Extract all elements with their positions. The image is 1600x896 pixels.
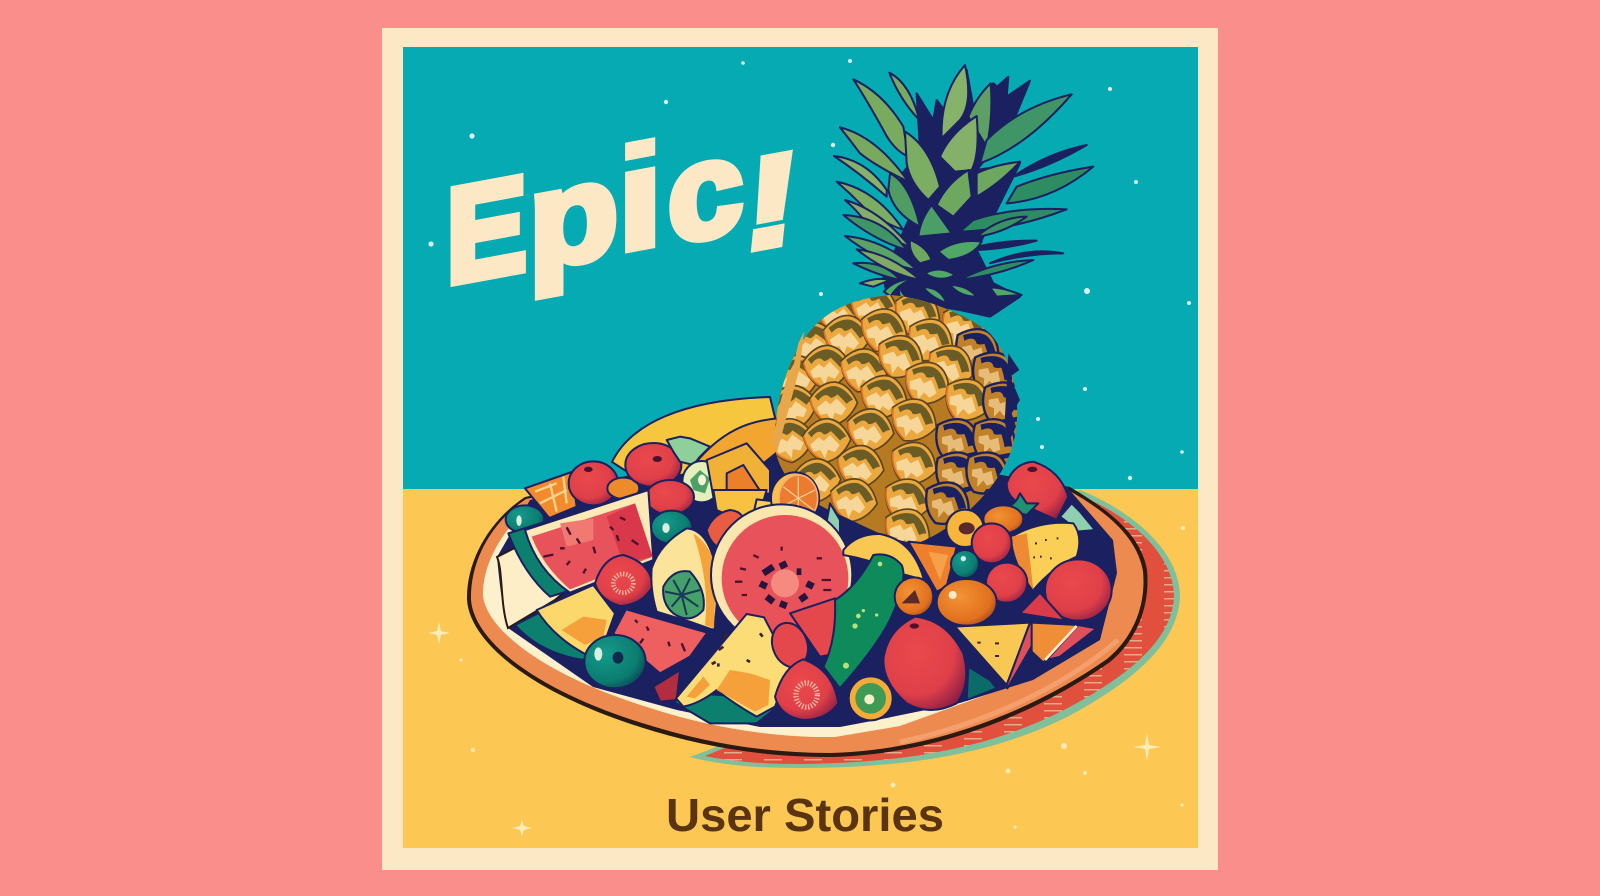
yellow table panel [403, 489, 1198, 848]
pineapple crown [834, 65, 1093, 317]
banana [612, 397, 782, 490]
red blob [646, 480, 694, 515]
plate shadow [690, 490, 1180, 768]
strawberry lower [775, 659, 838, 720]
left fruits [506, 437, 852, 723]
sky dots [428, 59, 1191, 480]
poster illustration [382, 28, 1218, 870]
teal ball lower [584, 635, 646, 688]
green pickle [823, 554, 903, 688]
small dark red wedge [653, 670, 680, 702]
dark greens [967, 667, 997, 700]
plate [467, 440, 1148, 757]
red triangle [1020, 593, 1065, 621]
right fruits [823, 462, 1112, 720]
title: Epic! [446, 108, 808, 313]
red plum top [625, 443, 681, 487]
mango [1012, 523, 1079, 590]
red wedge [790, 598, 838, 657]
red ball mid [986, 563, 1027, 603]
title: Epic!: p [529, 133, 618, 300]
red ball [972, 523, 1012, 563]
teal sky panel [403, 47, 1198, 490]
peach slice [843, 534, 924, 580]
subtitle: User Stories: User Stories [666, 789, 944, 841]
pineapple body [772, 295, 1020, 542]
title: Epic!: c [668, 108, 743, 273]
fruit slice [946, 510, 984, 547]
large round melon [711, 504, 852, 646]
teal small ball [951, 550, 979, 578]
leaf on mango [1060, 503, 1095, 532]
title: Epic!: E [446, 148, 527, 313]
big red plum [883, 617, 966, 710]
teal ball middle [651, 511, 692, 544]
poster frame [382, 28, 1218, 870]
teal ball left [506, 505, 544, 533]
big yellow wedge [673, 614, 790, 723]
orange triangle right [1032, 623, 1097, 663]
orange slice [771, 472, 819, 524]
green star leaf lower [813, 503, 840, 550]
kiwi slice top [682, 461, 721, 502]
small strawberry [707, 510, 744, 548]
strawberry middle [595, 555, 653, 606]
kiwi small [849, 676, 893, 720]
small orange slice [607, 478, 639, 499]
green star leaf [667, 437, 710, 465]
small orange fruit [895, 577, 933, 616]
green leaf sprig [1007, 493, 1038, 515]
yellow cut fruit [713, 490, 780, 522]
red blob lower [766, 618, 814, 672]
title: Epic!: ! [736, 122, 808, 280]
pear with kiwi core [651, 528, 717, 630]
orange wedge [525, 472, 577, 518]
orange triangle [908, 542, 957, 592]
title: Epic!: i [614, 111, 667, 286]
orange ball [937, 579, 997, 626]
red plum left [569, 461, 618, 505]
plum top right [1007, 462, 1068, 520]
yellow triangle [955, 623, 1041, 688]
lower left melon [515, 585, 615, 660]
watermelon slice [613, 609, 707, 673]
pyramid fruit [707, 443, 770, 497]
small orange [983, 505, 1023, 533]
watermelon big [508, 490, 653, 597]
table sparkles [428, 526, 1185, 836]
big red right [1045, 559, 1112, 621]
